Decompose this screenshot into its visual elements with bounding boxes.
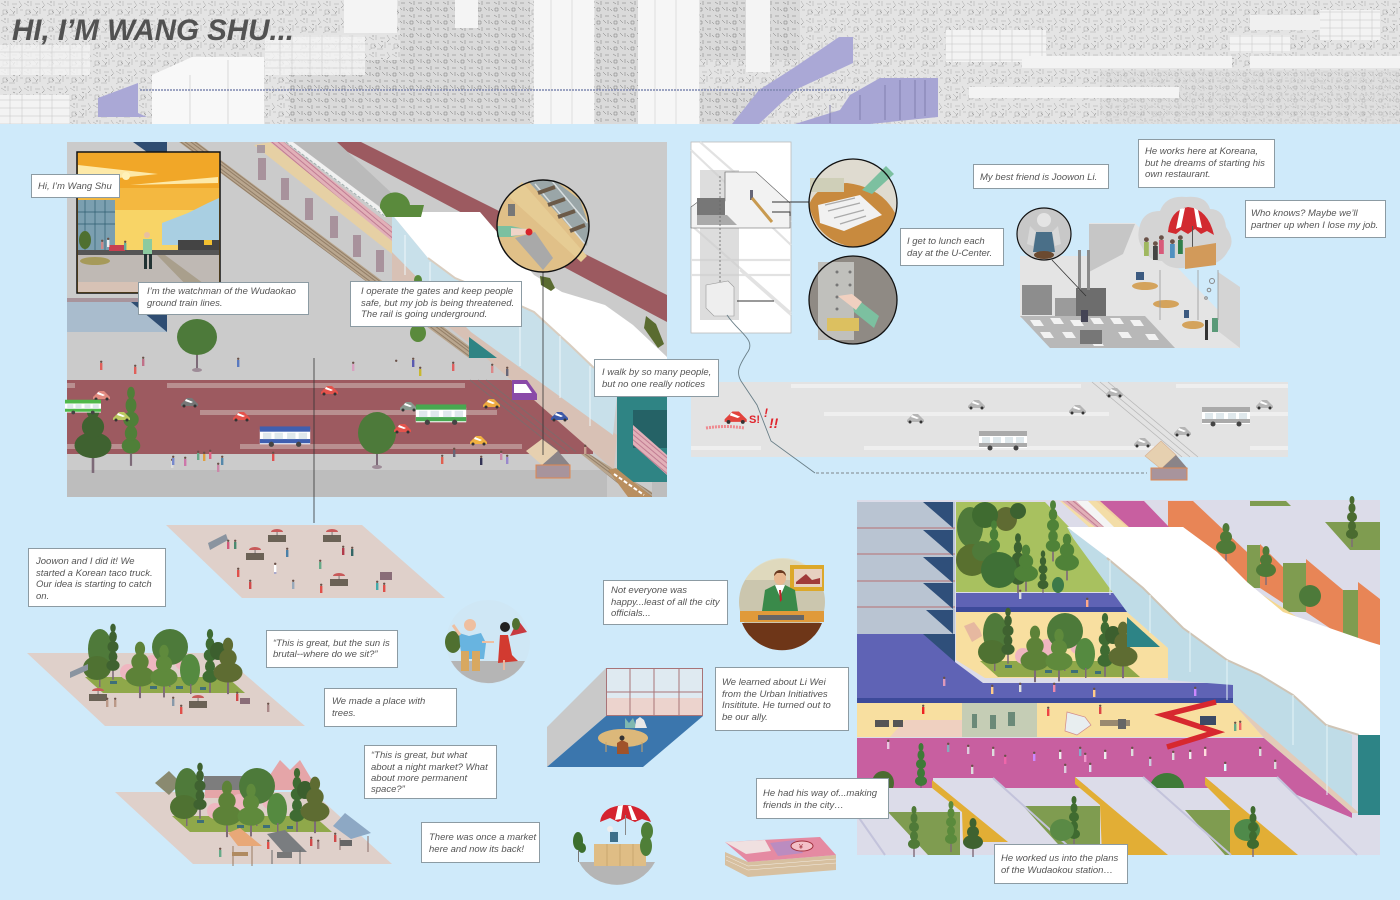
callout: friends in the city: friends in the city… [763, 800, 844, 811]
callout: taco truck: Our idea is starting to catch [36, 579, 152, 590]
inset: watchman at sunset [77, 152, 220, 293]
walking route road [691, 382, 1288, 457]
callout: taco truck: on. [36, 591, 49, 602]
plot: taco trucks [166, 525, 445, 598]
panel: watchman street scene [65, 142, 667, 523]
callout: Hi, I'm Wang Shu: Hi, I’m Wang Shu [38, 181, 112, 192]
callout: watchman [138, 282, 308, 314]
upper garden [956, 500, 1117, 596]
callout: Li Wei: Insititute. He turned out to [722, 700, 831, 711]
callout: walk by: I walk by so many people, [602, 367, 711, 378]
callout: night market [364, 746, 496, 798]
kitchen scene [1020, 223, 1240, 348]
purple walkway upper [956, 593, 1127, 612]
callout: plans of station [994, 844, 1128, 884]
near miss car and exclamations: ! [764, 406, 768, 420]
elevated platform [254, 142, 412, 272]
meeting room [547, 668, 703, 767]
top right orange terraces [1168, 496, 1380, 649]
callout: sun: brutal--where do we sit?” [273, 649, 378, 660]
callout: friends in the city [756, 778, 888, 818]
callout: night market: about more permanent [371, 773, 467, 784]
callout: who knows: partner up when I lose my job. [1250, 220, 1378, 231]
callout: gates [350, 282, 522, 326]
callout: night market: “This is great, but what [371, 750, 467, 761]
vignette: city official [739, 558, 825, 650]
callout: who knows: Who knows? Maybe we’ll [1251, 208, 1359, 219]
guard house small [1145, 441, 1188, 480]
callout: market back [422, 822, 540, 862]
callout: sun: “This is great, but the sun is [273, 638, 390, 649]
callout: night market: about a night market? What [371, 762, 488, 773]
left building slabs [67, 142, 167, 332]
callout: Li Wei [716, 668, 848, 730]
callout: Li Wei: from the Urban Initiatives [722, 689, 828, 700]
callout: Li Wei: We learned about Li Wei [722, 677, 827, 688]
magnified view: gate button [497, 180, 589, 272]
callout: lunch [900, 228, 1004, 266]
callout: best friend [974, 164, 1108, 188]
walking path line [727, 315, 1147, 473]
title: HI, I’M WANG SHU... [12, 14, 294, 47]
chef portrait [1017, 208, 1086, 296]
magnified view: elevator button [809, 256, 897, 344]
callout: trees [324, 688, 456, 726]
plaza crowd [887, 590, 1276, 774]
callout: Hi, I'm Wang Shu [32, 174, 120, 198]
callout: friends in the city: He had his way of...making [763, 788, 878, 799]
callout: trees: trees. [332, 708, 356, 719]
vehicles [65, 380, 568, 447]
teal building [469, 337, 667, 497]
stack of money: ¥ [799, 844, 803, 851]
guard house [526, 439, 570, 478]
callout: walk by: but no one really notices [602, 379, 705, 390]
top rail and magenta [1060, 501, 1170, 528]
teal wedges [1127, 617, 1233, 722]
panel: Wudaokou station plan [857, 496, 1380, 857]
callout: gates: safe, but my job is being threatened. [361, 298, 514, 309]
vignette: friends greeting [445, 600, 530, 684]
near miss car and exclamations: S! [749, 414, 760, 426]
road [67, 380, 593, 454]
callout: Koreana: own restaurant. [1145, 169, 1210, 180]
magnified view: lunch receipt [737, 159, 897, 301]
callout: walk by [594, 360, 718, 396]
callout: who knows [1246, 200, 1386, 238]
pedestrians [100, 357, 586, 472]
callout: taco truck: Joowon and I did it! We [35, 556, 135, 567]
station glass and wavy roof [1067, 527, 1380, 855]
thought bubble [1138, 197, 1232, 299]
near miss car and exclamations [706, 406, 779, 431]
yellow arcade [857, 703, 1263, 737]
train [608, 468, 652, 497]
station glass and roof [390, 212, 667, 470]
ground rail track [179, 142, 660, 497]
callout: Koreana: but he dreams of starting his [1145, 158, 1265, 169]
callout: night market: space?” [371, 784, 406, 795]
callout: watchman: ground train lines. [147, 298, 223, 309]
callout: market back: There was once a market [429, 832, 537, 843]
callout: plans of station: He worked us into the plans [1001, 853, 1118, 864]
callout: watchman: I’m the watchman of the Wudaokao [147, 286, 296, 297]
callout: gates: The rail is going underground. [361, 309, 487, 320]
header city drawing [0, 0, 1400, 124]
callout: taco truck [28, 548, 166, 606]
maroon band [329, 142, 667, 322]
callout: Koreana: He works here at Koreana, [1145, 146, 1258, 157]
blue plaza [857, 634, 1233, 703]
red stair [1164, 702, 1216, 747]
leader lines [314, 272, 543, 523]
callout: not everyone: officials... [611, 608, 651, 619]
near miss car and exclamations: !! [769, 415, 779, 431]
callout: Li Wei: be our ally. [722, 712, 768, 723]
callout: lunch: I get to lunch each [907, 236, 985, 247]
panel: office tower section [691, 142, 791, 333]
callout: Koreana [1138, 140, 1274, 188]
callout: not everyone: happy...least of all the city [611, 597, 721, 608]
vignette: food stall [573, 805, 655, 885]
callout: market back: here and now its back! [429, 844, 524, 855]
callout: taco truck: started a Korean taco truck. [36, 568, 153, 579]
callout: lunch: day at the U-Center. [907, 248, 992, 259]
street trees [74, 192, 664, 473]
callout: sun [266, 630, 398, 668]
callout: best friend: My best friend is Joowon Li. [980, 172, 1097, 183]
stack of money [725, 837, 836, 877]
callout: plans of station: of the Wudaokou station… [1001, 865, 1113, 876]
callout: not everyone [604, 580, 728, 624]
magenta plaza [857, 738, 1352, 818]
lower buildings [857, 743, 1380, 857]
yellow courtyard [956, 608, 1168, 682]
plot: trees [27, 624, 305, 726]
callout: gates: I operate the gates and keep people [361, 286, 513, 297]
callout: trees: We made a place with [332, 696, 425, 707]
callout: not everyone: Not everyone was [611, 585, 687, 596]
plot: night market [115, 760, 392, 866]
left slab stack [857, 502, 955, 634]
